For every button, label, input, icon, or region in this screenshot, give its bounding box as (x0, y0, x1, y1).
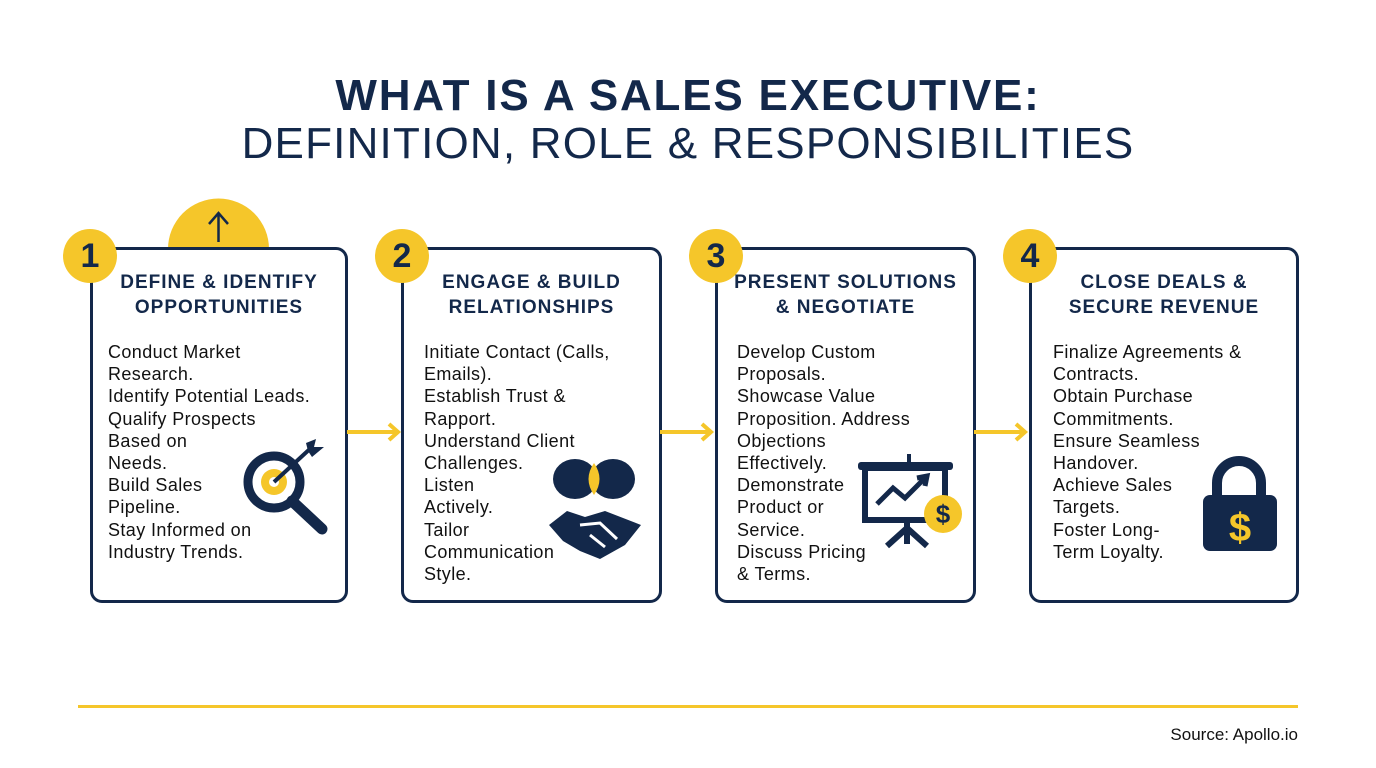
body 1 (108, 342, 310, 562)
body 2 (424, 342, 610, 584)
badge 1: 1 (81, 237, 99, 275)
icon: presentation easel with dollar: $ (936, 499, 951, 529)
heading 1: OPPORTUNITIES (135, 297, 303, 318)
body 2: Listen (424, 475, 474, 495)
icon: target magnifier (244, 439, 328, 534)
body 1: Build Sales (108, 475, 202, 495)
badge 3 (689, 229, 743, 283)
arrow 1 to 2 (347, 422, 401, 442)
body 4: Achieve Sales (1053, 475, 1172, 495)
body 4: Targets. (1053, 497, 1120, 517)
badge 1 (63, 229, 117, 283)
body 2: Emails). (424, 364, 492, 384)
body 2: Establish Trust & (424, 386, 566, 406)
body 3: Showcase Value (737, 386, 875, 406)
body 3: & Terms. (737, 564, 811, 584)
body 3: Proposals. (737, 364, 826, 384)
title: WHAT IS A SALES EXECUTIVE: (335, 71, 1041, 120)
icon: padlock with dollar: $ (1229, 506, 1251, 550)
body 3: Product or (737, 497, 824, 517)
body 3 (737, 342, 910, 584)
body 4: Handover. (1053, 453, 1139, 473)
panel: step 1 (90, 247, 348, 603)
body 1: Based on (108, 431, 187, 451)
arrow 2 to 3 (660, 422, 714, 442)
panel: step 2 (401, 247, 662, 603)
semicircle tab with up arrow (168, 198, 269, 247)
heading 2 (442, 272, 621, 318)
icon: handshake (549, 459, 641, 559)
body 4: Finalize Agreements & (1053, 342, 1242, 362)
body 4: Foster Long- (1053, 520, 1160, 540)
body 1: Conduct Market (108, 342, 241, 362)
body 3: Service. (737, 520, 805, 540)
heading 3: & NEGOTIATE (776, 297, 915, 318)
badge 4 (1003, 229, 1057, 283)
heading 2: RELATIONSHIPS (449, 297, 614, 318)
panel: step 3 (715, 247, 976, 603)
body 1: Identify Potential Leads. (108, 386, 310, 406)
heading 2: ENGAGE & BUILD (442, 272, 621, 293)
body 3: Demonstrate (737, 475, 844, 495)
body 3: Discuss Pricing (737, 542, 866, 562)
body 3: Effectively. (737, 453, 827, 473)
body 1: Stay Informed on (108, 520, 251, 540)
body 2: Actively. (424, 497, 493, 517)
heading 1: DEFINE & IDENTIFY (120, 272, 318, 293)
badge 2 (375, 229, 429, 283)
body 3: Proposition. Address (737, 409, 910, 429)
body 4: Contracts. (1053, 364, 1139, 384)
badge 3: 3 (707, 237, 725, 275)
icon: padlock with dollar (1203, 456, 1277, 551)
body 4 (1053, 342, 1242, 562)
body 2: Initiate Contact (Calls, (424, 342, 610, 362)
body 2: Communication (424, 542, 554, 562)
body 4: Commitments. (1053, 409, 1174, 429)
body 2: Challenges. (424, 453, 523, 473)
subtitle: DEFINITION, ROLE & RESPONSIBILITIES (242, 119, 1134, 168)
heading 3 (734, 272, 957, 318)
heading 1 (120, 272, 318, 318)
body 4: Obtain Purchase (1053, 386, 1193, 406)
body 1: Qualify Prospects (108, 409, 256, 429)
heading 4 (1069, 272, 1259, 318)
badge 4: 4 (1021, 237, 1039, 275)
body 3: Objections (737, 431, 826, 451)
body 1: Industry Trends. (108, 542, 243, 562)
body 2: Tailor (424, 520, 469, 540)
body 4: Term Loyalty. (1053, 542, 1164, 562)
body 2: Style. (424, 564, 471, 584)
body 1: Research. (108, 364, 194, 384)
badge 2: 2 (393, 237, 411, 275)
body 4: Ensure Seamless (1053, 431, 1200, 451)
source: Source: Apollo.io (1170, 725, 1298, 744)
heading 4: SECURE REVENUE (1069, 297, 1259, 318)
heading 3: PRESENT SOLUTIONS (734, 272, 957, 293)
body 2: Understand Client (424, 431, 575, 451)
body 3: Develop Custom (737, 342, 876, 362)
icon: presentation easel with dollar (858, 454, 962, 548)
body 1: Needs. (108, 453, 167, 473)
heading 4: CLOSE DEALS & (1080, 272, 1248, 293)
body 1: Pipeline. (108, 497, 181, 517)
body 2: Rapport. (424, 409, 496, 429)
panel: step 4 (1029, 247, 1299, 603)
arrow 3 to 4 (974, 422, 1028, 442)
